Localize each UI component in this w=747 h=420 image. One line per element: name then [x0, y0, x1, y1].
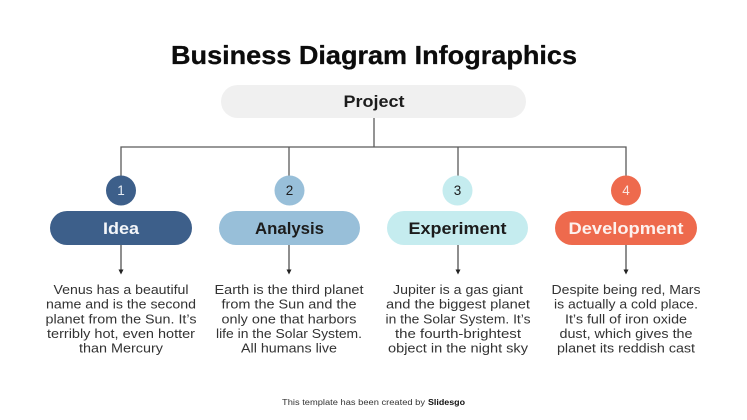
text: analysis description: [214, 282, 364, 356]
number badge 3: [442, 176, 472, 206]
number badge 4: 4: [622, 183, 630, 198]
text: experiment description: object in the night sky: [388, 340, 528, 356]
pill: experiment: Experiment: [408, 220, 507, 238]
connector tree: [121, 118, 626, 176]
pill: development: Development: [568, 220, 684, 238]
text: idea description: than Mercury: [79, 340, 163, 356]
number badge 2: [274, 176, 304, 206]
text: development description: [552, 282, 701, 356]
text: experiment description: in the Solar System. It’s: [386, 312, 531, 326]
text: development description: It’s full of iron oxide: [565, 312, 687, 326]
arrow: experiment to text: [456, 245, 460, 274]
panel: experiment: [386, 176, 531, 356]
panel: idea: [46, 176, 197, 356]
pill: analysis: Analysis: [255, 220, 324, 238]
text: experiment description: and the biggest planet: [386, 296, 530, 312]
text: analysis description: life in the Solar System.: [216, 326, 362, 341]
panel: analysis: [214, 176, 364, 356]
arrow: analysis to text: [286, 245, 292, 274]
footer credit: Slidesgo: [428, 398, 465, 407]
number badge 1: 1: [117, 183, 125, 198]
title: Business Diagram Infographics: [171, 40, 577, 70]
text: idea description: terribly hot, even hotter: [47, 326, 196, 341]
text: analysis description: All humans live: [241, 340, 337, 356]
text: development description: is actually a cold place.: [554, 296, 698, 312]
root node: project: Project: [344, 93, 405, 111]
arrow: idea to text: [118, 245, 124, 274]
pill: experiment: [387, 211, 528, 245]
footer credit: This template has been created by: [282, 398, 425, 407]
text: idea description: planet from the Sun. It’s: [46, 312, 197, 326]
text: analysis description: Earth is the third planet: [214, 282, 364, 297]
text: analysis description: only one that harbors: [222, 312, 357, 326]
text: idea description: Venus has a beautiful: [54, 282, 189, 297]
panel: development: [552, 176, 701, 356]
text: development description: Despite being red, Mars: [552, 282, 701, 297]
number badge 4: [611, 176, 641, 206]
number badge 3: 3: [454, 183, 461, 198]
text: development description: dust, which gives the: [560, 326, 692, 341]
footer credit: [282, 398, 465, 407]
pill: idea: Idea: [103, 220, 140, 238]
arrow: development to text: [624, 245, 628, 274]
pill: idea: [50, 211, 192, 245]
number badge 1: [106, 176, 136, 206]
root node: project: [221, 85, 526, 118]
text: analysis description: from the Sun and the: [222, 296, 356, 312]
text: development description: planet its reddish cast: [557, 340, 695, 356]
number badge 2: 2: [286, 183, 293, 198]
text: idea description: name and is the second: [46, 296, 196, 312]
text: experiment description: the fourth-brightest: [395, 326, 521, 341]
pill: development: [555, 211, 697, 245]
text: experiment description: [386, 282, 531, 356]
text: experiment description: Jupiter is a gas giant: [393, 282, 523, 297]
text: idea description: [46, 282, 197, 356]
pill: analysis: [219, 211, 360, 245]
